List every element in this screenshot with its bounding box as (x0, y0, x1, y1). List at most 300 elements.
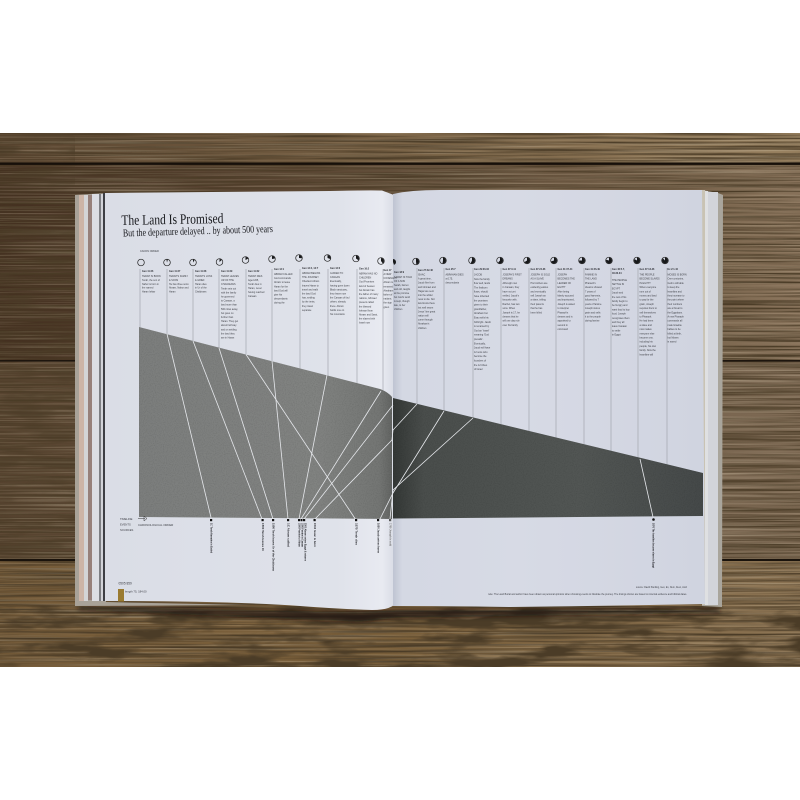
folio caption: length 75, 184.00 (125, 590, 147, 594)
event: Gen 46:5-7: want food to buy (612, 308, 630, 311)
key labels: EVENTS (120, 522, 131, 526)
event: Gen 12:1 (274, 268, 293, 305)
event: Gen 46:5-7: Gen 46:5-7, (612, 268, 625, 271)
event: Gen 11:27: He has three sons: (169, 283, 189, 286)
event: Gen 12:6: the Canaan of foul (330, 297, 350, 300)
event: Gen 18:9: at the promise (394, 292, 410, 295)
event: Gen 11:27: Abram, Nahor and (169, 287, 189, 290)
event: Gen 37:24-36: sell Joseph as (530, 294, 546, 298)
event: Gen 41:46-49: 7 years of (585, 290, 596, 293)
event: Gen 37:24-36: evidently jealous (530, 286, 549, 289)
event: Gen 16:2: Israel now (359, 322, 370, 325)
marker: Moses called (286, 519, 289, 548)
event: Gen 11:29: the land they (221, 332, 235, 335)
event: Gen 27:42-46: Gen 27:42-46 (418, 269, 434, 272)
event: Gen 18:9: Gen 18:9 (394, 271, 405, 274)
event: Gen 29:30-34: grandfather, (474, 308, 487, 311)
event: Gen 18:9 (394, 271, 412, 311)
event: Gen 27:42-46: Jesus' line great (418, 310, 436, 313)
event: Gen 41:46-49: dreams showed (585, 286, 603, 289)
event: Gen 41:37-44: After being (558, 290, 570, 293)
event: Gen 41:37-44: and imprisoned, (558, 299, 575, 302)
event: Gen 37:3-11: over his family (502, 324, 519, 327)
marker: Gen 20: 1500 Abram enters Egypt & returns (304, 523, 307, 562)
marker: Gen 19: 1500 Famine in Canaan (300, 523, 304, 547)
event: Gen 16:2: the slaves birth (359, 318, 376, 321)
event: Gen 41:46-49: it to the people (585, 316, 601, 318)
chart paper grain (139, 330, 539, 518)
event: Gen 41:37-44: Gen 41:37-44 (558, 268, 573, 271)
event: Gen 46:5-7: Jacob and (612, 292, 624, 295)
event: Gen 27:42-46: Abraham's (418, 323, 430, 326)
event: Gen 37:24-36 (530, 268, 550, 314)
event: Gen 41:46-49: FAMINE IN (585, 274, 597, 276)
moon phase circles (138, 255, 668, 266)
event: Gen 29:30-34: the promises (474, 299, 488, 302)
event: Gen 46:5-7 (612, 268, 630, 337)
event: Gen 16:2: Ishmael from (359, 309, 373, 312)
event: Gen 11:29: 500 miles away, (221, 308, 238, 311)
event: Gen 11:26: Terah, the son of (142, 279, 160, 282)
event: Gen 11:32: Aged 205, (248, 279, 259, 282)
event: Gen 11:32: Haran, never (248, 287, 262, 290)
event: Gen 12:4, 12:7: separate (302, 309, 312, 312)
event: Ex 2:1-10: they increase to (668, 294, 685, 298)
event: Gen 41:37-44: dreams and is (558, 316, 573, 318)
event: Gen 17: Abraham (384, 289, 393, 292)
event: Gen 41:46-49: Gen 41:46-49 (585, 268, 601, 271)
event: Gen 29:30-34: Jacob will have (474, 347, 491, 350)
event: Gen 29:30-34: 12 sons who (474, 351, 488, 354)
event: Gen 41:46-49: Joseph stores (585, 307, 601, 310)
event: Gen 12:6: they leave now (330, 292, 346, 296)
event: Gen 29:30-34: the 12 tribes (474, 364, 488, 367)
event: Gen 11:27: Haran (169, 291, 176, 294)
event: Gen 46:5-7: EGYPT (612, 287, 621, 290)
event: Gen 12:6: having gone down (330, 284, 350, 287)
event: Gen 12:4, 12:7 (302, 267, 321, 312)
event: Gen 46:5-7: SETTLE IN (612, 283, 624, 286)
event: Gen 11:29: UR OF THE (221, 279, 234, 282)
event: Gen 47:13-26: IN EGYPT (640, 282, 651, 285)
event: Gen 11:27: Gen 11:27 (169, 270, 181, 273)
event: Gen 12:6: others, already (330, 301, 347, 304)
event: Gen 37:24-36: Gen 37:24-36 (530, 268, 546, 271)
marker: Terah leaves Ur: 1500 Terah leaves Ur (261, 523, 264, 551)
event: Gen 27:42-46: Jacob flee from (418, 282, 434, 285)
event: Gen 17: Abram is (384, 281, 394, 284)
marker: Joseph: 1700 Joseph is sold (388, 523, 392, 547)
event: Gen 11:28 (195, 270, 213, 294)
event: Gen 16:2: God Promises (359, 281, 375, 284)
event: Gen 12:1: descendants (274, 298, 288, 301)
event: Gen 17: nations; (384, 298, 392, 301)
event: Gen 12:4, 12:7: has, settling (302, 297, 315, 300)
event: Gen 37:3-11: sons. When (502, 307, 516, 310)
event: Gen 11:29: with the family (221, 291, 237, 294)
event: Gen 47:13-26: When everyone (640, 286, 657, 289)
event: Gen 18:9: OF A SON (394, 280, 405, 283)
event: Gen 46:5-7: the rest of his (612, 296, 627, 299)
event: Gen 11:32: Gen 11:32 (248, 270, 260, 273)
event dots and rotated labels (209, 518, 655, 572)
event: Gen 12:6: GUIDED TO (330, 272, 343, 275)
event: Gen 12:1: during the (274, 302, 285, 305)
event: Gen 12:4, 12:7: leaves Haran to (302, 284, 319, 287)
event: Gen 37:3-11: JOSEPH'S FIRST (502, 274, 522, 276)
event: Gen 41:46-49: Pharaoh's (585, 282, 596, 285)
event: Gen 12:6: Gen 12:6 (330, 267, 341, 270)
event: Ex 2:1-10: God is still able (668, 282, 684, 285)
wood table background (0, 133, 800, 667)
event: Gen 37:3-11: DREAMS (502, 278, 513, 281)
event: Gen 16:2: present called (359, 301, 375, 304)
event: Gen 17: Gen 17 (384, 269, 392, 272)
event: Gen 12:1: ABRAM CALLED (274, 273, 293, 276)
event: Gen 37:24-36: His brothers are (530, 282, 548, 285)
event: Gen 27:42-46: ness to die. Not (418, 298, 435, 301)
event: Gen 12:4, 12:7: ABRAM BEGINS (302, 272, 321, 275)
event: Gen 47:13-26: now makes (640, 328, 652, 331)
left page (105, 190, 394, 610)
event: Gen 29:30-34: birthright. Jacob (474, 321, 492, 324)
source line: source: David Pantling, Gen, Ex, Num, Deut, Josh (636, 586, 688, 589)
event: Gen 41:37-44: BECOMES THE (558, 278, 575, 281)
event: Gen 16:2: ABRAM HAS NO (359, 272, 377, 276)
key labels: SOURCES (120, 528, 133, 532)
event: Gen 37:24-36: AS A SLAVE (530, 278, 544, 281)
event: Gen 11:27: TERAH'S FAMILY (169, 275, 189, 278)
event: Gen 12:1: Gen 12:1 (274, 268, 285, 271)
event: Gen 11:29: Gen 11:29 (221, 270, 233, 273)
event: Gen 37:24-36: been killed (530, 311, 543, 314)
event: Ex 2:1-10: A new Pharaoh (668, 316, 684, 318)
timeline key (120, 516, 173, 532)
event: Gen 12:4, 12:7: Gen 12:4, 12:7 (302, 267, 319, 270)
event: Ex 2:1-10: the point where (668, 299, 685, 302)
event: Gen 25:7: descendants (446, 282, 460, 285)
event: Ex 2:1-10: Over centuries, (668, 278, 684, 281)
event: Ex 2:1-10: the Egyptians. (668, 311, 683, 314)
marker: Terah dies: 1575 Terah dies (354, 523, 357, 546)
event: Gen 29:30-34: JACOB (474, 274, 482, 276)
event: Gen 12:4, 12:7: travel and walk (302, 288, 319, 291)
event: Gen 41:46-49: THE LAND (585, 278, 597, 281)
event: Gen 11:28: TERAH'S LOSS (195, 275, 213, 278)
event: Gen 47:13-26: money and land (640, 294, 657, 298)
event: Gen 37:3-11: will one day rule (502, 320, 520, 323)
event: Gen 11:32: Terah dies in (248, 283, 262, 286)
event: Gen 41:46-49 (585, 268, 603, 323)
event: Ex 2:1-10: to keep the (668, 286, 680, 289)
event: Gen 37:3-11: Although now (502, 282, 517, 285)
event: Gen 41:37-44: falsely accused (558, 294, 575, 298)
event: Gen 11:29: Terah sets out (221, 287, 236, 290)
event: Gen 11:26: the named (142, 287, 154, 290)
event: Gen 12:1: Haran for the (274, 285, 289, 288)
event: Gen 11:29: further than (221, 316, 234, 319)
event: Gen 12:4, 12:7: they travel (302, 305, 313, 308)
gold tab (118, 589, 124, 602)
chronological order label: CHRONOLOGICAL ORDER (138, 523, 173, 527)
event: Gen 41:37-44: command (558, 328, 569, 331)
event: Gen 47:13-26: everyone else (640, 332, 655, 335)
event: Gen 12:6 (330, 267, 350, 316)
event: Gen 37:24-36: their parents (530, 303, 545, 306)
event: Gen 11:29: and on settling (221, 328, 237, 331)
source and note (488, 586, 688, 596)
event: Gen 11:27: & SONS (169, 279, 178, 282)
event: Gen 11:29: he governed (221, 296, 235, 298)
marker: Jacob arrives: 1650 Jacob arrives home (376, 523, 380, 554)
canon order label: CANON ORDER (140, 250, 159, 253)
event: Ex 2:1-10: is saved (668, 341, 677, 344)
event: Gen 11:29: land more than (221, 304, 238, 307)
event: Gen 27:42-46: nation will (418, 314, 429, 318)
event: Gen 37:24-36: that he has (530, 307, 543, 310)
event: Ex 2:1-10: their numbers (668, 303, 683, 306)
event: Ex 2:1-10: male Israelite (668, 324, 682, 327)
event: Gen 11:28: & GRIEF (195, 279, 205, 282)
event: Gen 41:37-44: to interpret (558, 307, 569, 310)
event: Gen 29:30-34: flows, should (474, 291, 488, 294)
event: Gen 12:6: there. Abram (330, 305, 344, 308)
event: Gen 12:6: builds one on (330, 309, 345, 312)
event: Gen 46:5-7: to settle (612, 329, 621, 332)
event: Gen 27:42-46: into the wilder (418, 294, 433, 297)
event: Gen 11:26: Haran Ishtar (142, 291, 155, 294)
event: Gen 47:13-26: THE PEOPLE (640, 274, 655, 276)
event: Gen 41:37-44: appointed to (558, 320, 571, 323)
event: Gen 46:5-7: and they all (612, 321, 625, 324)
event: Gen 29:30-34: The firstborn (474, 286, 488, 289)
event: Gen 47:13-26: grain, Joseph (640, 303, 655, 306)
event: Gen 29:30-34: meaning 'God (474, 334, 489, 337)
title block (121, 211, 273, 239)
folio number: 0505 859 (118, 582, 132, 586)
event: Gen 11:28: Gen 11:28 (195, 270, 207, 273)
event: Gen 47:13-26: Israelites will (640, 353, 654, 356)
event: Gen 41:46-49: during famine (585, 320, 600, 323)
event: Gen 11:28: Haran dies (195, 283, 207, 286)
marker: Torah narrative: 1C Torah Narrative is Ended (209, 523, 212, 554)
event: Gen 27:42-46: come through (418, 319, 433, 322)
event: Gen 37:3-11: Joseph is 17, he (502, 311, 521, 314)
event: Gen 12:1: Abram to leave (274, 281, 291, 284)
event: Gen 11:26: Gen 11:26 (142, 270, 154, 273)
event: Gen 37:24-36: and eventually (530, 290, 547, 293)
event: Gen 18:9: Sarah, barren (394, 284, 409, 287)
vertical event rules (140, 268, 667, 465)
event: Gen 46:5-7: leave Canaan (612, 325, 627, 328)
event: Gen 29:30-34: have inherited (474, 295, 490, 298)
event: Gen 11:26 (142, 270, 161, 294)
event: Gen 18:9: children (394, 308, 403, 311)
event: Gen 37:3-11: favourite wife, (502, 299, 518, 302)
right page edges stack (702, 190, 723, 607)
event: Gen 12:4, 12:7: THE JOURNEY (302, 276, 319, 279)
event: Gen 47:13-26: family. Now the (640, 349, 656, 352)
event: Ex 2:1-10: MOSES IS BORN (668, 274, 687, 276)
event: Gen 12:4, 12:7: Obedient Abram (302, 280, 319, 283)
event: Gen 27:42-46: but well sworn (418, 306, 434, 309)
event: Gen 25:7 (446, 268, 464, 285)
event: Gen 46:5-7: family begin to (612, 300, 628, 303)
area chart: years of delay (139, 327, 704, 520)
event: Gen 27:42-46: children (418, 327, 427, 330)
event: Gen 11:29: CHALDEANS (221, 283, 236, 286)
event: Gen 46:5-7: food. Joseph (612, 313, 626, 316)
event: Gen 11:29: to Canaan, a (221, 300, 235, 303)
marker: Moses called: 1C Abram called (286, 523, 289, 548)
event: Gen 29:30-34: flow well, lands (474, 282, 491, 285)
event: Gen 29:30-34: God an 'Israel' (474, 329, 490, 332)
event: Gen 16:2: land of heaven (359, 285, 375, 288)
event: Gen 37:3-11: in Canaan, they (502, 286, 520, 289)
event: Gen 29:30-34: Abraham but (474, 312, 488, 315)
event: Gen 18:9: late, to her (394, 304, 405, 307)
event: Gen 41:37-44: second in (558, 324, 568, 327)
icon: arrow (138, 516, 147, 521)
event: Gen 37:3-11: Gen 37:3-11 (502, 268, 517, 271)
event: Gen 12:6: his mountains (330, 313, 346, 316)
event: Gen 47:13-26: to Pharaoh. (640, 316, 652, 318)
event: Gen 29:30-34: Now the family (474, 278, 490, 281)
event: Gen 29:30-34 (474, 268, 492, 371)
left page edges stack (75, 193, 250, 606)
event: Gen 29:30-34: of Israel (474, 368, 483, 371)
key labels: TIMELINE (120, 517, 133, 521)
event: Gen 27:42-46: A great time, (418, 278, 432, 281)
event: Gen 17: given (384, 306, 390, 309)
event: Gen 41:37-44: Pharaoh's (558, 311, 569, 314)
folio block (118, 582, 147, 602)
event: Gen 37:3-11: dreams that he (502, 316, 519, 318)
event: Gen 29:30-34: given to their (474, 304, 488, 307)
event: Gen 47:13-26: He had been (640, 320, 654, 323)
event: Gen 41:46-49: years of famine. (585, 303, 602, 306)
event: Gen 47:13-26: requires them to (640, 307, 657, 310)
event: Gen 37:3-11: have not yet (502, 290, 516, 293)
event: Gen 17: the sign (384, 302, 393, 305)
book shadow (78, 606, 720, 622)
event: Gen 37:3-11: Rachel, has two (502, 303, 520, 306)
event: Gen 41:37-44: LEADER OF (558, 282, 572, 285)
event: Gen 41:37-44: Joseph is asked (558, 303, 575, 306)
event: Gen 12:1: God commands (274, 277, 292, 280)
event: Gen 29:30-34: Gen 29:30-34 (474, 268, 490, 271)
event: Gen 11:32: Canaan (248, 295, 257, 298)
event: Gen 16:2 (359, 268, 379, 325)
event: Gen 47:13-26: runs out of (640, 290, 651, 293)
event: Gen 12:6: CANAAN (330, 276, 340, 279)
event: Gen 29:30-34: prevails'. (474, 338, 484, 341)
event: Gen 41:37-44: JOSEPH (558, 274, 567, 276)
event: Gen 18:9: is kept, though (394, 300, 410, 303)
event: Gen 37:3-11: settled, Jacob's (502, 294, 520, 298)
event: Gen 12:6: Eventually, (330, 280, 342, 283)
event: Gen 29:30-34: is renamed by (474, 325, 490, 328)
event: Ex 2:1-10 (668, 268, 687, 344)
event: Gen 16:2: the father of many (359, 293, 379, 296)
event: Gen 37:24-36: JOSEPH IS SOLD (530, 274, 550, 276)
event: Gen 16:2: Gen 16:2 (359, 268, 370, 270)
event: Gen 27:42-46: Hagar are sent (418, 290, 434, 293)
title: The Land Is Promised (121, 211, 224, 229)
event: Gen 47:13-26: people, his own (640, 345, 657, 348)
event: Gen 37:3-11 (502, 268, 522, 327)
event: Gen 41:37-44: EGYPT (558, 286, 566, 289)
event: Gen 27:42-46: and Ishmael and (418, 286, 436, 289)
event: Gen 27:42-46 (418, 269, 436, 330)
event: Gen 46:5-7: in Egypt (612, 334, 621, 337)
event: Gen 29:30-34: Eventually, (474, 342, 486, 345)
event: Gen 47:13-26: BECOME SLAVES (640, 278, 660, 281)
event: Gen 11:27 (169, 270, 189, 294)
event: Gen 17: renamed (384, 285, 394, 288)
event: Gen 47:13-26: including his (640, 341, 653, 344)
event: Gen 29:30-34: Esau sells his (474, 316, 489, 320)
marker: Isaac is born: 1510 Isaac is born (313, 523, 316, 548)
event: Gen 11:29: Haran. They get (221, 320, 238, 323)
event: Gen 47:13-26: to pay for the (640, 299, 654, 302)
event: Gen 11:32: TERAH DIES (248, 275, 263, 278)
event: Gen 41:46-49: grain and sells (585, 311, 601, 314)
event: Gen 11:29: but goes no (221, 312, 234, 315)
event: Ex 2:1-10: Ex 2:1-10 (668, 268, 679, 271)
event: Gen 25:7: Gen 25:7 (446, 268, 456, 271)
event: Gen 11:29: TERAH LEAVES (221, 275, 239, 278)
event: Gen 11:28: Chaldeans (195, 291, 207, 294)
white connector lines (167, 334, 653, 520)
event: Gen 47:13-26: a slave and (640, 324, 652, 327)
event: Gen 47:13-26: Gen 47:13-26 (640, 268, 655, 271)
right page (393, 190, 705, 607)
marker: Terah leaves for Chaldeans: 1500 Terah leaves Ur of the Chaldeans (271, 523, 274, 572)
event: Gen 46:5-7: recognises them (612, 317, 630, 320)
event: Gen 18:9: but God's word (394, 296, 411, 299)
event: Gen 27:42-46: land know there (418, 302, 436, 305)
event: Gen 41:46-49: followed by 7 (585, 299, 600, 302)
event: Gen 11:26: TERAH IS BORN (142, 275, 161, 278)
event: Gen 18:9: and old, laughs (394, 288, 411, 291)
event: Gen 47:13-26: become one, (640, 336, 654, 340)
note line: note: The Land Burial and author have been drawn as personal opinions when choosing events to illustrate the journey. The timings shown are based on internal evidence and biblical dates. (488, 593, 687, 596)
event: Gen 11:28: in Ur of the (195, 287, 207, 290)
event: Gen 47:13-26 (640, 268, 660, 356)
event: Gen 17: COVENANT (384, 277, 397, 280)
event: Gen 47:13-26: sell themselves (640, 311, 657, 314)
event: Ex 2:1-10: but Moses (668, 336, 679, 340)
event: Gen 29:30-34: become the (474, 355, 487, 358)
event: Gen 46:5-7: THE PEOPLE (612, 279, 627, 282)
event: Gen 16:2: the blessed (359, 305, 372, 308)
marker: Terah dies (354, 519, 357, 546)
marker: Gen 18: 1500 Promise to Abram (297, 523, 300, 547)
event: Gen 27:42-46: ISAAC (418, 274, 425, 276)
open book (75, 190, 723, 622)
event: Gen 18:9: SARAH IS TOLD (394, 276, 412, 279)
event text columns (142, 267, 687, 371)
event: Ex 2:1-10: Israelites and (668, 290, 682, 293)
event: Gen 12:6: Black sanctuary, (330, 288, 348, 291)
event: Gen 17: father of (384, 294, 393, 296)
event: Gen 41:37-44 (558, 268, 575, 331)
event: Gen 12:4, 12:7: by the tents; (302, 301, 315, 304)
event: Gen 11:32: having reached (248, 291, 265, 294)
event: Gen 12:1: land God will (274, 289, 288, 292)
event: Ex 2:1-10: babies to be (668, 328, 681, 331)
